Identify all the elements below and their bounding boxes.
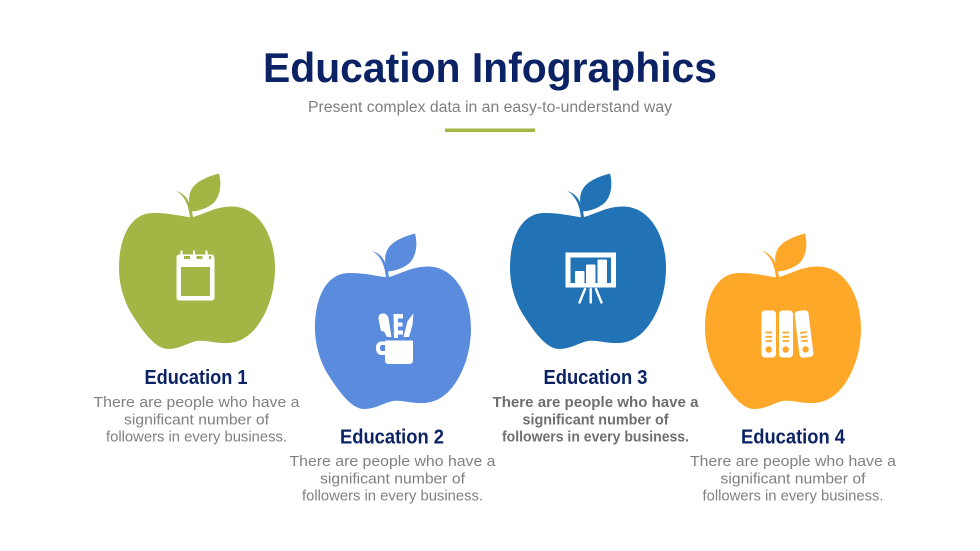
heading: Education 1 [144, 367, 248, 389]
text block: There are people who have a [690, 453, 897, 470]
title: Education Infographics [263, 44, 717, 91]
text block: significant number of [720, 470, 866, 488]
text block: followers in every business. [502, 430, 689, 446]
icon: calendar [176, 252, 214, 300]
heading: Education 2 [340, 426, 444, 448]
panel: education 3 [492, 174, 699, 446]
subtitle: Present complex data in an easy-to-understand way [308, 99, 672, 116]
heading: Education 3 [544, 367, 648, 389]
panel: education 4 [690, 234, 897, 504]
icon: presentation board [566, 252, 616, 302]
apple: dark blue [510, 174, 666, 349]
text block [690, 453, 897, 504]
text block: followers in every business. [702, 488, 884, 504]
text block: significant number of [124, 412, 270, 428]
heading: Education 4 [741, 426, 846, 448]
apple: orange [705, 234, 861, 409]
text block: There are people who have a [290, 453, 496, 470]
icon: binders [762, 310, 814, 358]
panel: education 2 [290, 234, 496, 504]
text block [290, 453, 496, 504]
text block: There are people who have a [492, 395, 699, 411]
title underline [445, 128, 535, 132]
text block: significant number of [320, 470, 466, 488]
text block [492, 395, 699, 446]
apple: green [119, 174, 275, 349]
panel: education 1 [94, 174, 300, 446]
apple: blue [315, 234, 471, 409]
text block: followers in every business. [302, 488, 483, 504]
icon: pen cup [376, 314, 414, 364]
text block: followers in every business. [106, 428, 287, 446]
text block: There are people who have a [94, 394, 300, 411]
text block [94, 394, 300, 446]
text block: significant number of [522, 412, 669, 428]
